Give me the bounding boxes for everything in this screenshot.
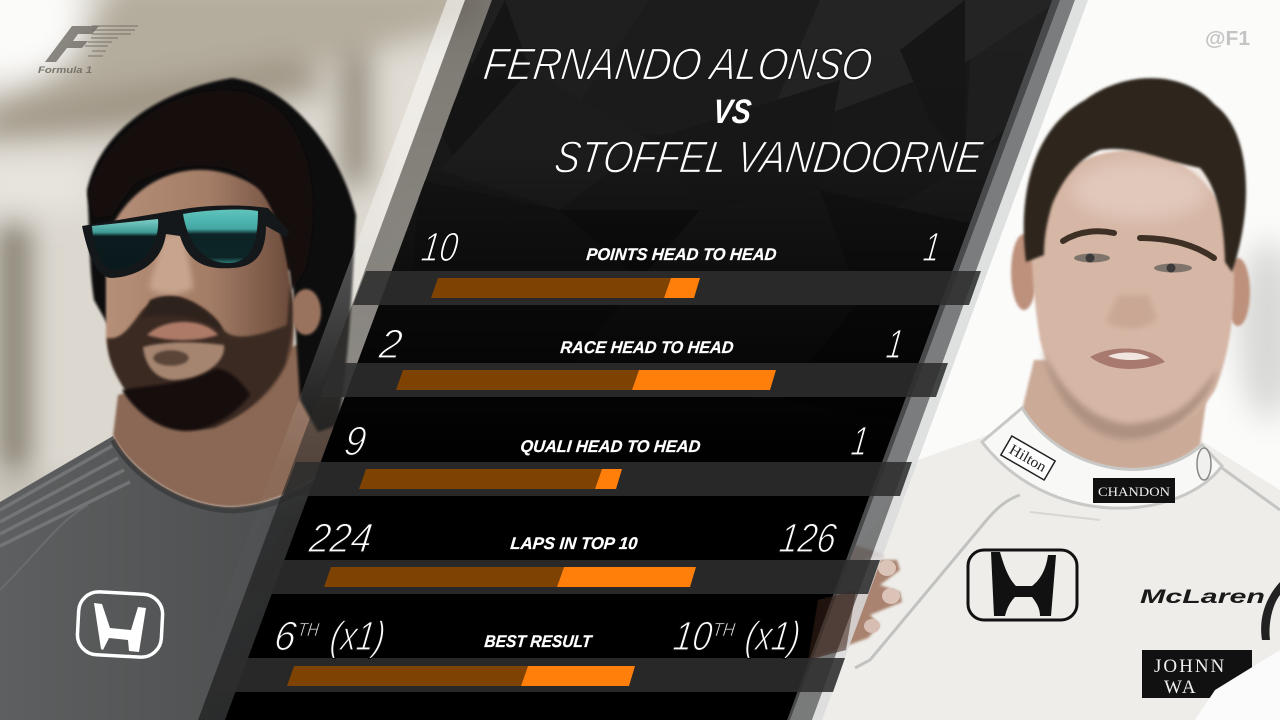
row band	[212, 658, 845, 692]
heading: Stoffel Vandoorne: STOFFEL VANDOORNE	[552, 132, 986, 182]
heading: Fernando Alonso: FERNANDO ALONSO	[481, 39, 876, 89]
Johnnie Walker sponsor label: WA	[1164, 677, 1198, 698]
Alonso neck	[113, 340, 338, 507]
value: Vandoorne races: 1	[884, 321, 906, 367]
Hilton collar label	[1001, 436, 1055, 480]
Johnnie Walker sponsor label	[1142, 650, 1252, 698]
Vandoorne mouth	[1090, 349, 1165, 369]
row: laps in top 10	[248, 515, 880, 594]
bar: Alonso share	[359, 469, 602, 489]
photo: Stoffel Vandoorne	[780, 0, 1280, 720]
row: race head to head	[320, 321, 948, 397]
F1 logo watermark: Formula 1	[38, 65, 92, 76]
bar: Alonso share	[287, 666, 528, 686]
Alonso lips	[147, 322, 218, 340]
bar: Alonso share	[324, 567, 564, 587]
bar: Vandoorne share	[595, 469, 622, 489]
title: driver names	[481, 39, 986, 182]
F1 logo watermark	[38, 26, 138, 76]
Vandoorne nose	[1106, 295, 1157, 328]
Vandoorne ears	[1011, 234, 1250, 326]
bar: Vandoorne share	[664, 278, 700, 298]
value: Alonso best result: (x1)	[328, 613, 388, 659]
value: Alonso best result: TH	[296, 620, 320, 641]
value: Vandoorne best result: 10	[671, 613, 715, 659]
label: quali head to head: QUALI HEAD TO HEAD	[520, 437, 701, 456]
Alonso sunglasses	[82, 206, 290, 278]
bar: Alonso share	[431, 278, 671, 298]
label: best result: BEST RESULT	[484, 632, 594, 651]
panel outer light stripes	[180, 0, 1088, 720]
value: Alonso points: 10	[419, 224, 461, 270]
value: Vandoorne best result: TH	[711, 620, 736, 641]
row: quali head to head	[283, 418, 912, 496]
Alonso shirt	[0, 430, 420, 720]
Vandoorne forehead	[1072, 160, 1208, 220]
icon: Honda logo on Vandoorne	[968, 550, 1077, 620]
Alonso face	[106, 170, 294, 430]
arm strap	[1261, 582, 1280, 640]
heading: VS: VS	[711, 93, 753, 131]
label: points head to head: POINTS HEAD TO HEAD	[586, 245, 777, 264]
value: Alonso races: 2	[376, 321, 405, 367]
Chandon collar label: CHANDON	[1098, 484, 1171, 499]
hand showing through panel	[808, 590, 856, 660]
McLaren sponsor text: McLaren	[1140, 587, 1265, 608]
value: Vandoorne qualifying: 1	[849, 418, 871, 464]
Alonso chin	[143, 342, 224, 380]
Vandoorne hair	[1024, 78, 1246, 272]
value: Alonso best result	[272, 613, 388, 659]
label: race head to head: RACE HEAD TO HEAD	[560, 338, 734, 357]
value: Vandoorne points: 1	[921, 224, 943, 270]
Vandoorne hand right	[1195, 650, 1280, 720]
row band	[283, 462, 912, 496]
Alonso hair fringe	[88, 90, 313, 290]
value: Vandoorne best result	[671, 613, 803, 659]
photo: Fernando Alonso	[0, 0, 520, 720]
row: points head to head	[353, 224, 981, 305]
Vandoorne eyebrows	[1063, 231, 1214, 258]
icon: Honda logo on Alonso	[76, 591, 164, 658]
Alonso beard	[107, 285, 293, 431]
bar: Vandoorne share	[521, 666, 635, 686]
value: Vandoorne laps: 126	[777, 515, 839, 561]
panel: central dark background	[200, 0, 1080, 720]
Vandoorne suit	[780, 420, 1280, 720]
label: laps in top 10: LAPS IN TOP 10	[510, 534, 639, 553]
bar: Alonso share	[396, 370, 639, 390]
Chandon collar label	[1093, 478, 1175, 503]
Vandoorne eyes	[1074, 254, 1192, 272]
row band	[248, 560, 880, 594]
Vandoorne hand	[810, 542, 902, 660]
bar: Vandoorne share	[557, 567, 696, 587]
Vandoorne neck	[1022, 360, 1212, 470]
row band	[320, 363, 948, 397]
value: Alonso qualifying: 9	[342, 418, 369, 464]
row: best result	[212, 613, 845, 692]
row band	[353, 271, 981, 305]
bar: Vandoorne share	[632, 370, 776, 390]
value: Vandoorne best result: (x1)	[743, 613, 803, 659]
Alonso nose highlight	[149, 232, 193, 294]
Johnnie Walker sponsor label: JOHNN	[1154, 656, 1226, 677]
value: Alonso best result: 6	[272, 613, 299, 659]
value: Alonso laps: 224	[306, 515, 375, 561]
Alonso hair back	[87, 78, 356, 432]
Vandoorne face	[1031, 151, 1234, 440]
Vandoorne collar	[982, 408, 1222, 508]
Vandoorne stubble	[1042, 350, 1218, 440]
@F1 handle: @F1	[1205, 28, 1250, 50]
Hilton collar label: Hilton	[1006, 442, 1049, 476]
right collar emblem	[1197, 448, 1211, 480]
Alonso ear	[291, 289, 321, 335]
